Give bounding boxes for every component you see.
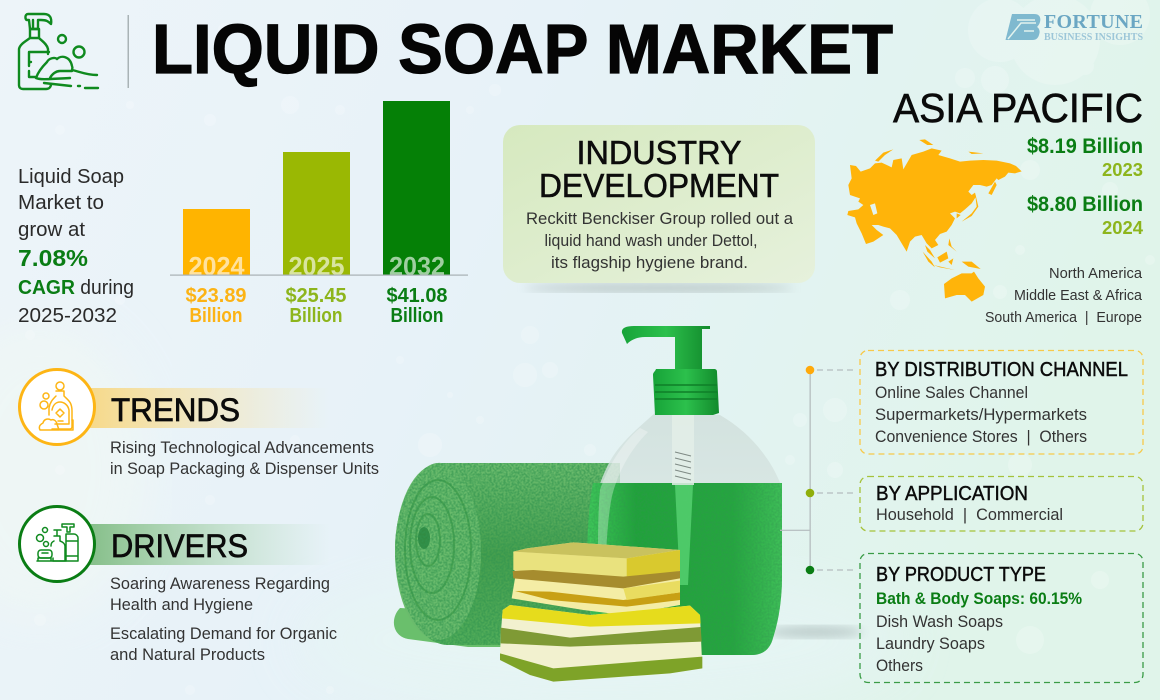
shadow bbox=[767, 626, 863, 638]
bar 2032: Billion bbox=[390, 305, 444, 327]
text block: other regions: South America | Europe bbox=[985, 309, 1142, 326]
bar 2024: Billion bbox=[190, 305, 242, 327]
panel: industry development: INDUSTRY bbox=[576, 134, 742, 171]
logo: Fortune Business Insights: FORTUNE bbox=[1044, 11, 1143, 33]
text block: CAGR statement: grow at bbox=[18, 219, 85, 241]
dot: product type bbox=[806, 566, 814, 574]
bar 2024: $23.89 bbox=[186, 285, 246, 307]
map: Asia Pacific bbox=[847, 139, 1022, 302]
text: trends description: Rising Technological Advancements bbox=[110, 439, 374, 457]
text block: CAGR statement: Liquid Soap bbox=[18, 166, 124, 188]
bottom soap bbox=[500, 605, 702, 682]
text block: CAGR statement: 2025-2032 bbox=[18, 305, 117, 327]
panel: by product type: Others bbox=[876, 657, 923, 675]
pump bbox=[622, 326, 710, 370]
text block: CAGR statement bbox=[18, 166, 134, 327]
text: trends description bbox=[110, 439, 379, 478]
icon: dish soap bottle bbox=[20, 370, 94, 444]
text: trends description: in Soap Packaging & Dispenser Units bbox=[110, 460, 379, 478]
panel: by product type: Bath & Body Soaps: 60.15% bbox=[876, 589, 1082, 608]
panel: by distribution channel: Supermarkets/Hypermarkets bbox=[875, 406, 1087, 424]
towel bbox=[394, 463, 620, 647]
panel: drivers bbox=[20, 506, 337, 664]
logo: Fortune Business Insights: BUSINESS INSIGHTS bbox=[1044, 32, 1143, 43]
bottle bbox=[587, 326, 782, 655]
text block: other regions: Middle East & Africa bbox=[1014, 287, 1143, 304]
heading: trends: TRENDS bbox=[111, 392, 240, 428]
title: LIQUID SOAP MARKET bbox=[152, 10, 893, 88]
dot: distribution bbox=[806, 366, 814, 374]
header divider bbox=[128, 15, 129, 88]
panel: industry development: DEVELOPMENT bbox=[539, 167, 779, 204]
stat: Asia Pacific 2024 value: 2024 bbox=[1102, 218, 1143, 238]
stat: Asia Pacific 2023 value: 2023 bbox=[1102, 160, 1143, 180]
heading band: trends bbox=[90, 388, 330, 428]
text: drivers description: and Natural Products bbox=[110, 646, 265, 664]
heading band: drivers bbox=[90, 524, 330, 565]
panel: industry development: Reckitt Benckiser Group rolled out a bbox=[526, 210, 794, 228]
icon: soap dispenser and washing hand bbox=[19, 14, 98, 89]
text block: other regions bbox=[985, 265, 1143, 326]
icon: soap products bbox=[20, 506, 94, 582]
panel: trends bbox=[20, 370, 379, 478]
panel: by application bbox=[860, 476, 1143, 531]
text: drivers description: Health and Hygiene bbox=[110, 596, 253, 614]
bar 2032: $41.08 bbox=[386, 285, 448, 307]
heading: drivers: DRIVERS bbox=[111, 528, 248, 564]
text: drivers description: Soaring Awareness Regarding bbox=[110, 575, 330, 593]
soap bars bbox=[500, 542, 702, 682]
text block: CAGR statement: 7.08% bbox=[18, 245, 88, 271]
stat: Asia Pacific 2023 value bbox=[1027, 135, 1143, 180]
text: drivers description bbox=[110, 575, 337, 664]
bar 2025 bbox=[283, 152, 350, 327]
bar 2024 bbox=[183, 209, 250, 327]
top soap bbox=[512, 542, 680, 615]
product photo illustration: towel, bottle and soaps bbox=[394, 326, 863, 682]
panel: by distribution channel bbox=[860, 350, 1143, 454]
panel: by distribution channel: BY DISTRIBUTION CHANNEL bbox=[875, 359, 1128, 381]
bar 2025: 2025 bbox=[288, 251, 344, 281]
bar chart bbox=[170, 101, 468, 327]
bar 2032: 2032 bbox=[389, 251, 445, 281]
text block: CAGR statement: CAGR during bbox=[18, 277, 134, 299]
dot: application bbox=[806, 489, 814, 497]
connector tree bbox=[780, 366, 857, 574]
panel: industry development bbox=[503, 125, 815, 292]
panel: industry development: its flagship hygiene brand. bbox=[551, 254, 748, 272]
panel: by distribution channel: Convenience Stores | Others bbox=[875, 428, 1087, 446]
bar 2025: $25.45 bbox=[286, 285, 346, 307]
logo: Fortune Business Insights bbox=[1006, 11, 1143, 43]
panel: industry development: liquid hand wash under Dettol, bbox=[544, 232, 758, 250]
stat: Asia Pacific 2023 value: $8.19 Billion bbox=[1027, 135, 1143, 158]
bar 2025: Billion bbox=[290, 305, 342, 327]
stat: Asia Pacific 2024 value: $8.80 Billion bbox=[1027, 193, 1143, 216]
text: drivers description: Escalating Demand for Organic bbox=[110, 625, 337, 643]
panel: by distribution channel: Online Sales Channel bbox=[875, 384, 1028, 402]
panel: by product type bbox=[860, 554, 1143, 682]
panel: by product type: Dish Wash Soaps bbox=[876, 613, 1003, 631]
stat: Asia Pacific 2024 value bbox=[1027, 193, 1143, 238]
panel: by application: BY APPLICATION bbox=[876, 483, 1028, 505]
panel: by application: Household | Commercial bbox=[876, 506, 1063, 524]
bar 2032 bbox=[383, 101, 450, 327]
panel: by product type: Laundry Soaps bbox=[876, 635, 985, 653]
panel: by product type: BY PRODUCT TYPE bbox=[876, 564, 1046, 586]
text block: other regions: North America bbox=[1049, 265, 1143, 282]
bar 2024: 2024 bbox=[188, 251, 245, 281]
text block: CAGR statement: Market to bbox=[18, 192, 104, 214]
heading: Asia Pacific: ASIA PACIFIC bbox=[893, 85, 1143, 131]
